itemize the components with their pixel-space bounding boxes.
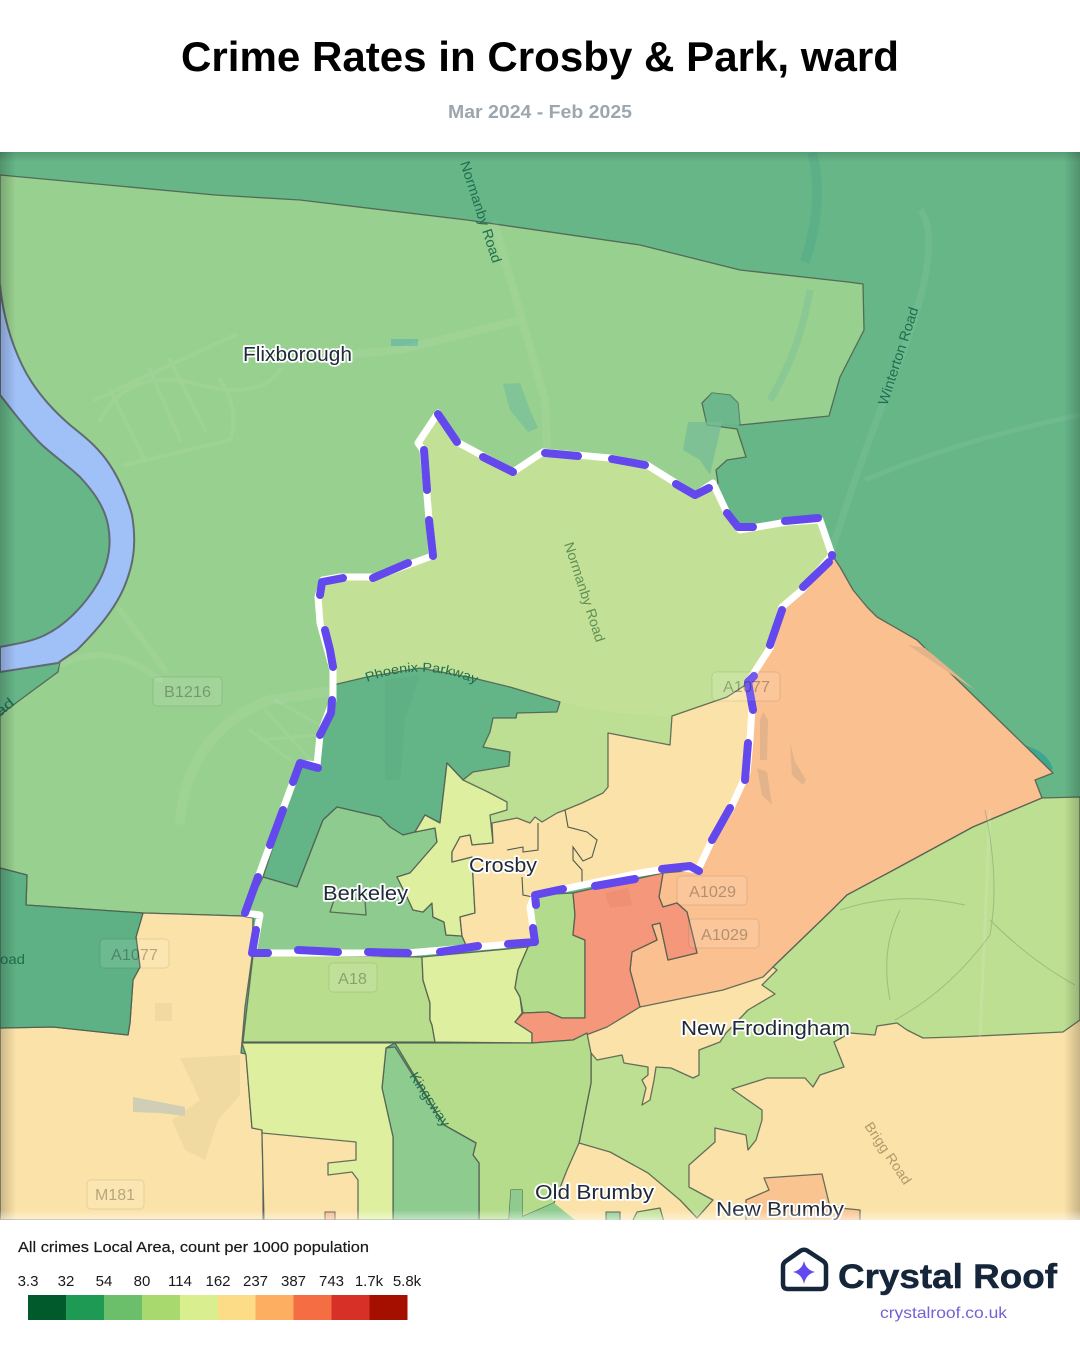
subtitle: date range: Mar 2024 - Feb 2025	[448, 101, 632, 122]
ward green block	[463, 702, 670, 823]
choropleth map	[0, 152, 1080, 1220]
region: dark green lower-left	[0, 868, 143, 1035]
legend values: 114	[168, 1273, 192, 1290]
place names: New Brumby	[716, 1199, 844, 1221]
region: New Brumby orange	[746, 1174, 860, 1222]
legend values: 1.7k	[355, 1273, 384, 1290]
region: green right	[579, 797, 1080, 1218]
road names: Normanby Road	[561, 540, 609, 644]
region: small green fragments	[606, 1212, 620, 1222]
road shield labels: A1029	[689, 884, 736, 901]
road names: Brigg Road	[862, 1119, 915, 1187]
place names: Flixborough	[243, 344, 352, 366]
place names: New Frodingham	[681, 1018, 850, 1040]
place names: Berkeley	[323, 883, 408, 905]
legend values: 80	[134, 1273, 150, 1290]
place names	[243, 344, 850, 1221]
region: Crosby lime	[397, 763, 507, 936]
road shield labels: A1029	[701, 927, 748, 944]
title: Crime Rates in Crosby & Park, ward	[181, 33, 899, 80]
map edge vignette	[0, 152, 1080, 1220]
logo: Crystal Roof	[783, 1250, 1058, 1322]
road shield labels: A1077	[723, 679, 770, 696]
legend values: 3.3	[18, 1273, 38, 1290]
legend colour scale	[28, 1295, 408, 1320]
road shield labels: A1077	[111, 947, 158, 964]
website link: crystalroof.co.uk	[880, 1305, 1008, 1322]
river	[0, 285, 134, 672]
legend values: 162	[205, 1273, 231, 1290]
region: green centre	[515, 893, 585, 1018]
region: lime left	[242, 1043, 395, 1220]
region: beige lower-right	[522, 968, 1080, 1220]
legend values	[18, 1273, 422, 1290]
legend values: 743	[319, 1273, 344, 1290]
region: lime centre	[422, 947, 532, 1043]
road names	[0, 161, 918, 1185]
region: green A18	[243, 955, 435, 1042]
legend title: All crimes Local Area, count per 1000 population	[18, 1239, 369, 1256]
road shield labels: M181	[95, 1187, 135, 1204]
road names: Kingsway	[406, 1069, 454, 1130]
road shield labels	[95, 679, 770, 1204]
ward interior	[262, 420, 828, 878]
region: salmon hot spot	[515, 873, 697, 1043]
road names: Winterton Road	[875, 305, 921, 407]
road shields	[87, 672, 780, 1209]
place names: Crosby	[469, 855, 537, 877]
region: beige lower-left	[0, 913, 263, 1220]
region: Kingsway green	[382, 1047, 479, 1220]
region: large light green area	[0, 175, 864, 916]
region: ward beige	[452, 682, 752, 945]
place names: Old Brumby	[535, 1182, 654, 1204]
road shield labels: A18	[338, 971, 367, 988]
legend values: 54	[96, 1273, 112, 1290]
road shield labels: B1216	[164, 684, 211, 701]
legend	[18, 1239, 422, 1320]
region: Berkeley mid green	[245, 807, 466, 953]
ward boundary	[245, 413, 832, 953]
region: dark green	[263, 668, 560, 887]
legend values: 237	[243, 1273, 268, 1290]
region: orange large	[630, 555, 1053, 1007]
road names: Normanby Road	[457, 159, 505, 265]
region: green lower middle	[395, 1033, 591, 1220]
road names: oad	[0, 951, 25, 967]
icon: house with star	[783, 1250, 826, 1289]
legend values: 5.8k	[393, 1273, 422, 1290]
legend values: 387	[281, 1273, 306, 1290]
region: beige block	[262, 1133, 358, 1220]
road names: Phoenix Parkway	[365, 662, 478, 684]
logo wordmark: Crystal Roof	[838, 1258, 1058, 1296]
legend values: 32	[58, 1273, 74, 1290]
